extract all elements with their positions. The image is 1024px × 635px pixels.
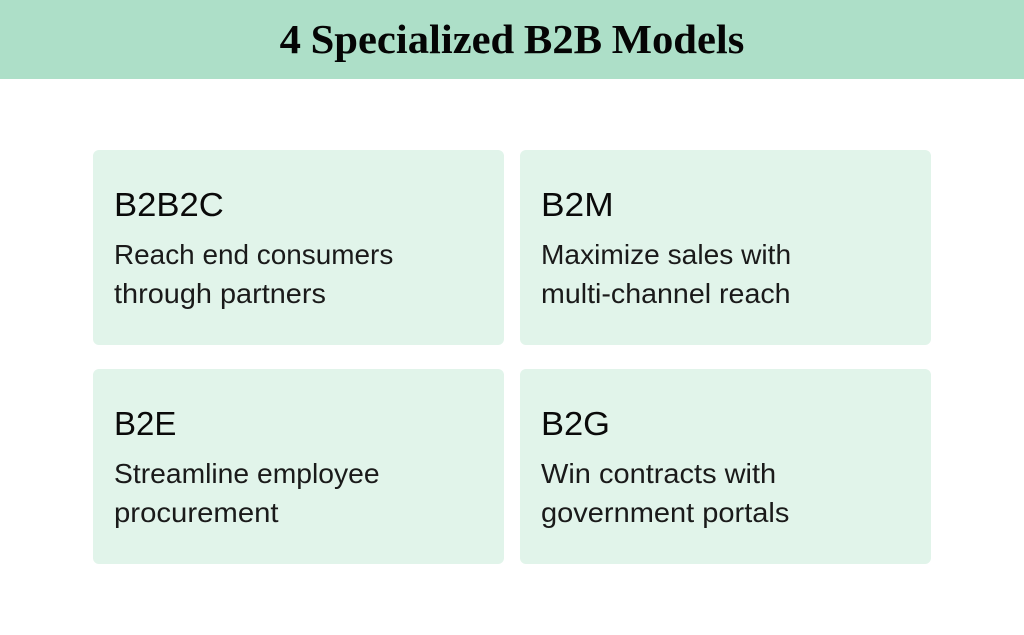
panel: B2M <box>520 150 931 345</box>
title: 4 Specialized B2B Models <box>280 16 744 62</box>
header band <box>0 0 1024 79</box>
text: B2E description: procurement <box>114 497 279 528</box>
text: B2B2C description: Reach end consumers <box>114 239 393 270</box>
heading: B2M: B2M <box>541 186 614 223</box>
heading: B2B2C: B2B2C <box>114 186 224 223</box>
text: B2G description <box>541 458 789 528</box>
text: B2B2C description <box>114 239 393 309</box>
heading: B2E: B2E <box>114 405 176 442</box>
text: B2G description: Win contracts with <box>541 458 776 489</box>
text: B2M description <box>541 239 791 309</box>
panel: B2G <box>520 369 931 564</box>
text: B2E description <box>114 458 380 528</box>
heading: B2G: B2G <box>541 405 610 442</box>
panel: B2E <box>93 369 504 564</box>
panel: B2B2C <box>93 150 504 345</box>
text: B2G description: government portals <box>541 497 789 528</box>
text: B2M description: Maximize sales with <box>541 239 791 270</box>
text: B2M description: multi-channel reach <box>541 278 791 309</box>
text: B2E description: Streamline employee <box>114 458 380 489</box>
text: B2B2C description: through partners <box>114 278 326 309</box>
